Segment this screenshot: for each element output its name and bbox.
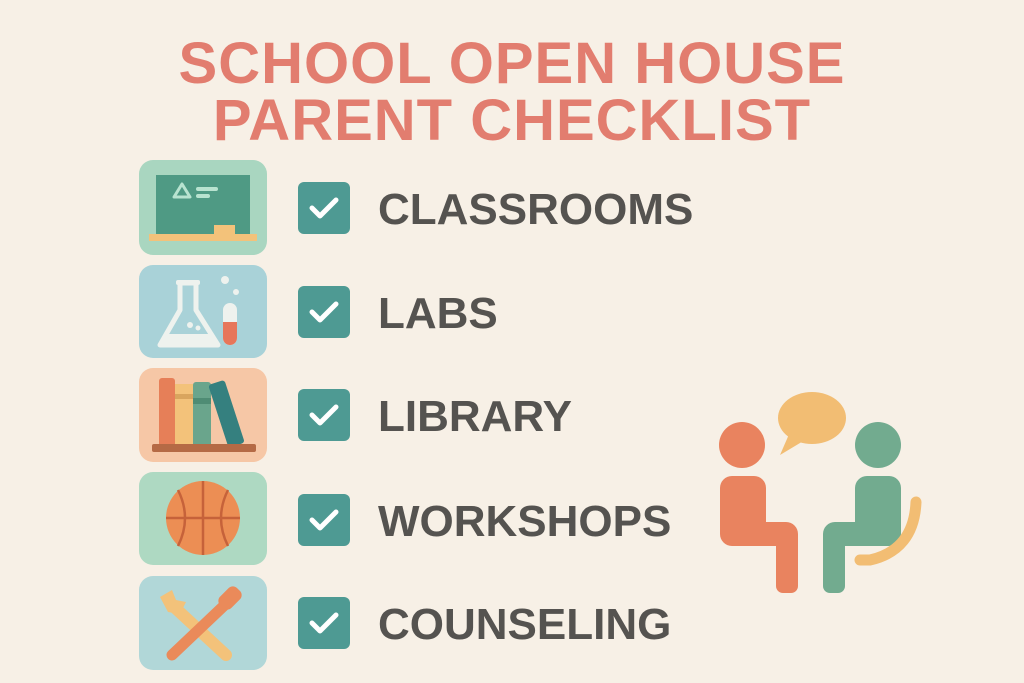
checklist labels: LIBRARY (378, 392, 572, 441)
checklist labels (378, 185, 693, 649)
checkboxes (298, 182, 350, 649)
checklist labels: CLASSROOMS (378, 185, 693, 234)
icon: tools (139, 576, 267, 670)
icon: lab flask (139, 265, 267, 358)
checklist labels: LABS (378, 289, 498, 338)
icon: basketball (139, 472, 267, 565)
title: PARENT CHECKLIST (213, 88, 811, 153)
checklist labels: COUNSELING (378, 600, 671, 649)
checklist labels: WORKSHOPS (378, 497, 671, 546)
title: SCHOOL OPEN HOUSE (179, 31, 845, 96)
icon: classroom chalkboard (139, 160, 267, 255)
illustration: counseling conversation (719, 392, 916, 593)
icon: library books (139, 368, 267, 462)
title (179, 31, 845, 153)
